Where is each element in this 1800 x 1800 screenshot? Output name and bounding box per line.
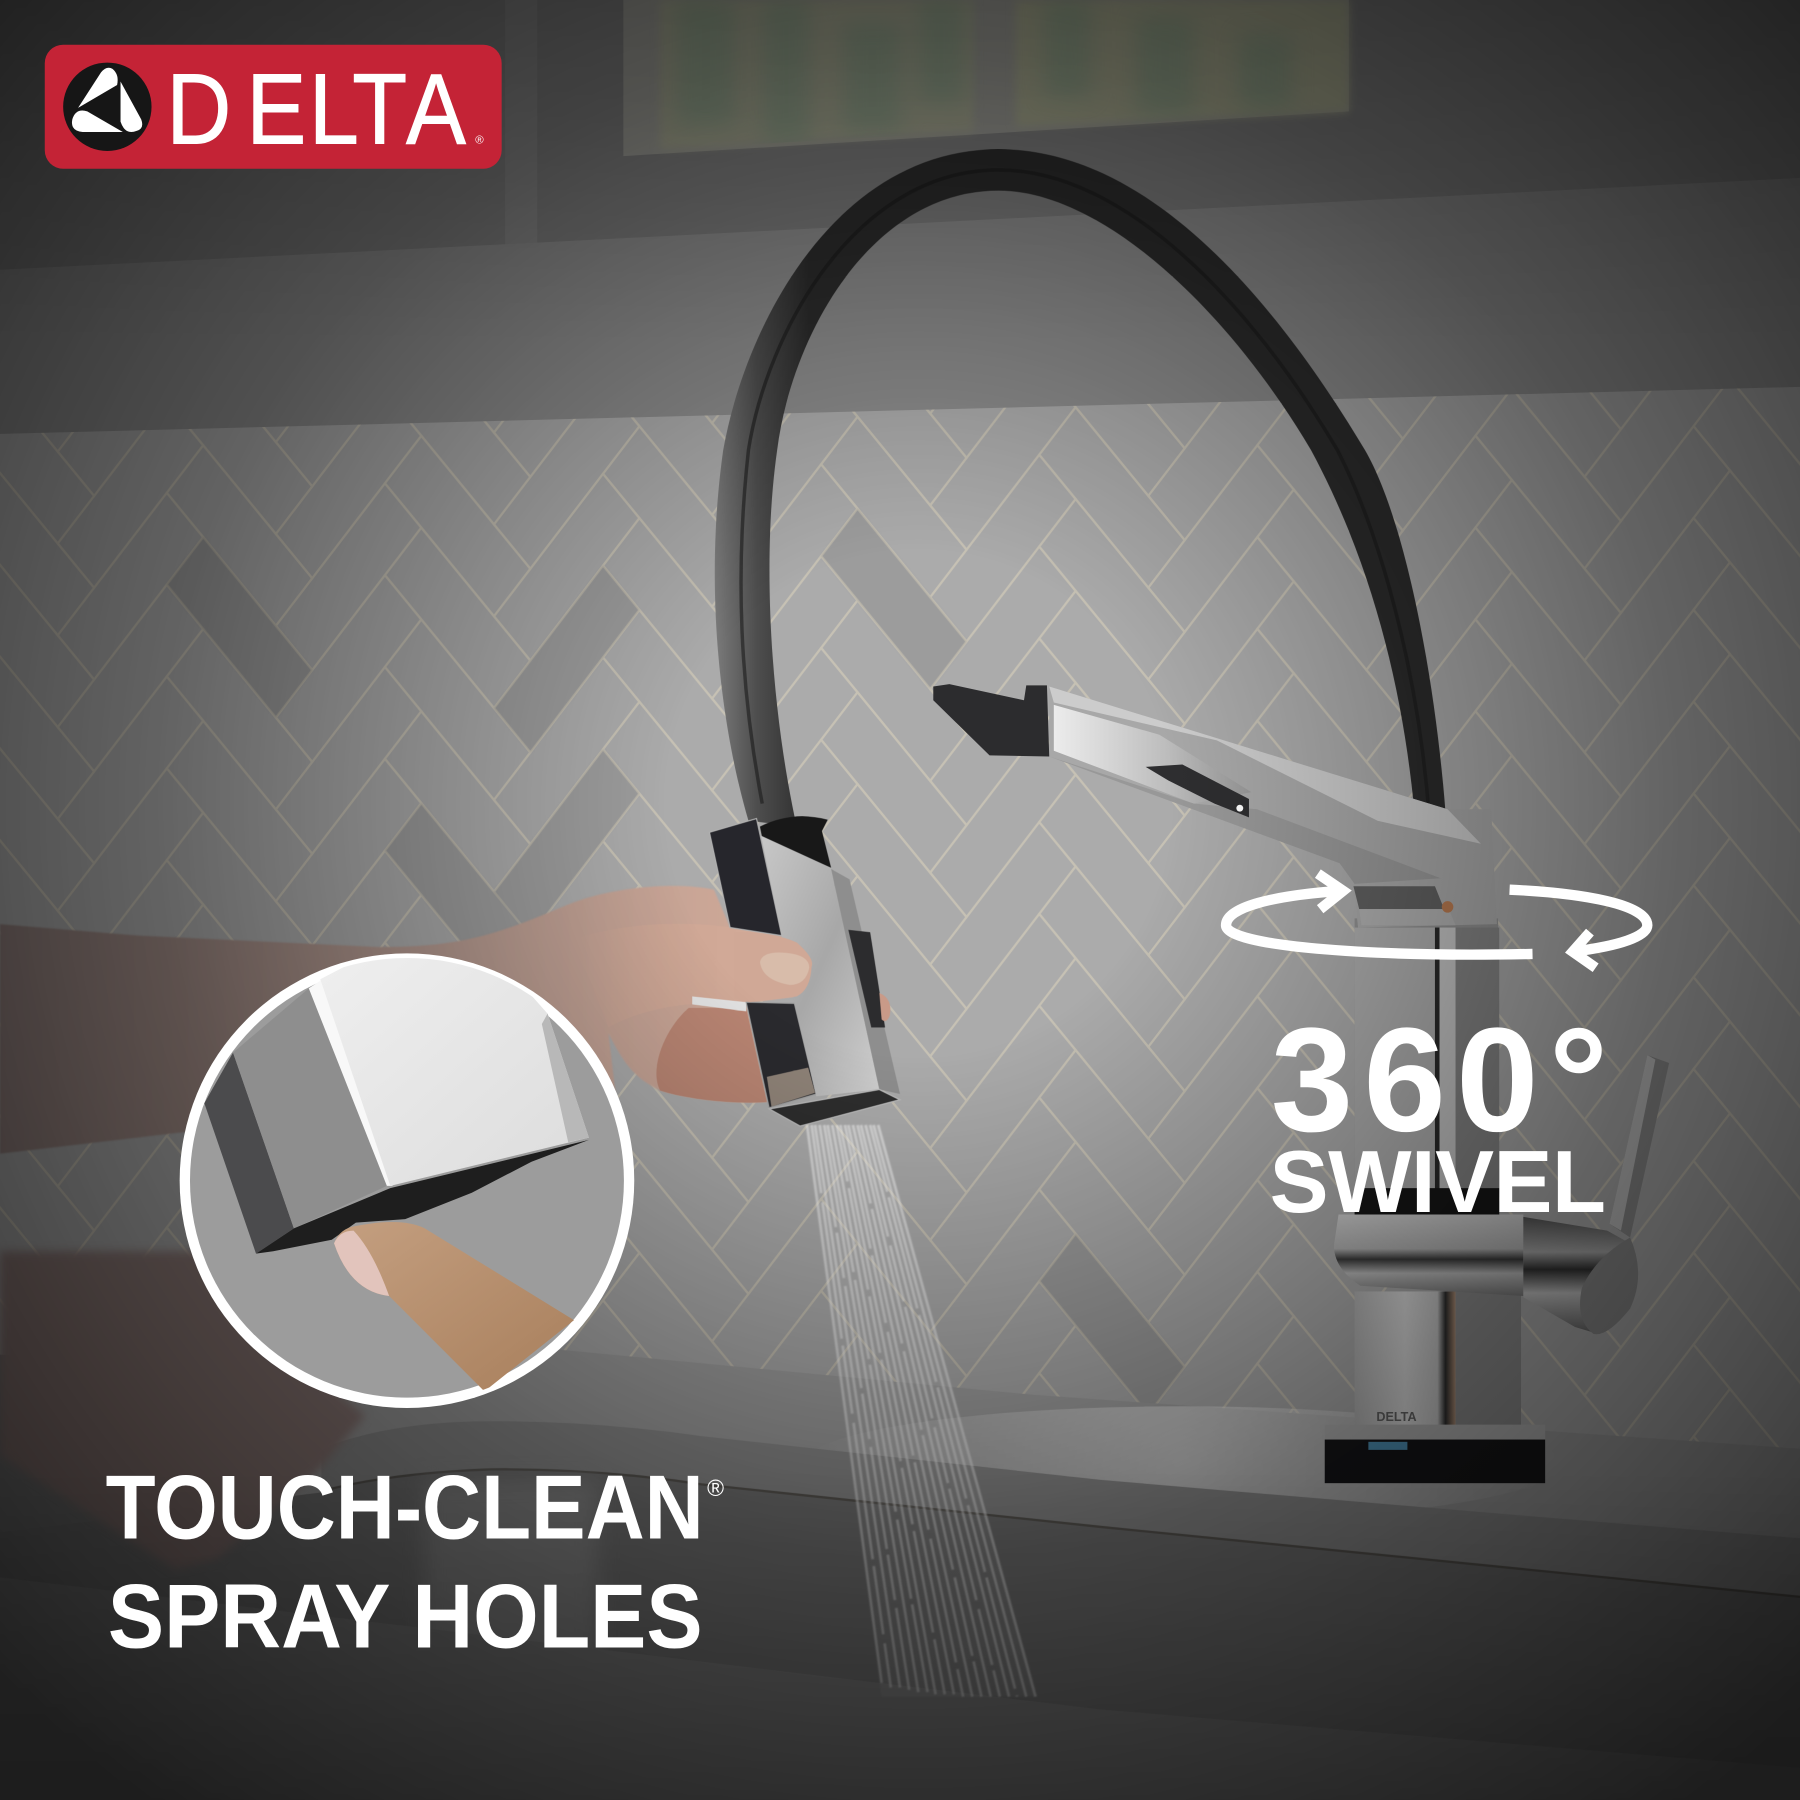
near counter ledge [0, 1577, 1800, 1800]
spout lower edge [1049, 757, 1441, 884]
gap between fingers [692, 996, 746, 1011]
handle lever [1609, 1055, 1669, 1238]
handle cap [1580, 1238, 1638, 1334]
swivel spout [933, 684, 1497, 928]
inset disc [180, 953, 634, 1408]
window sill band [0, 178, 1800, 434]
sprayer button [848, 930, 885, 1027]
sprayer chrome front [761, 836, 879, 1096]
herringbone tile backsplash [0, 387, 1800, 1464]
palm shadow [656, 1008, 767, 1103]
counter glow near faucet base [804, 1406, 1561, 1521]
inset circle: touch-clean close up [180, 947, 634, 1408]
sprayer lower left face [746, 1002, 816, 1108]
black base plate [1325, 1425, 1545, 1483]
sink basin [0, 1470, 1800, 1768]
lower hand [0, 1251, 365, 1569]
reflection on lower face [767, 1068, 815, 1107]
faucet column [1355, 918, 1499, 1194]
spray head underside [256, 1140, 589, 1254]
stainless sink rim [321, 1470, 1800, 1598]
thumb over sprayer [735, 932, 812, 1002]
heading: spray holes: SPRAY HOLES [108, 1566, 703, 1667]
spout upper face [1049, 686, 1481, 844]
basin reflection [425, 1481, 597, 1676]
handle connector [1523, 1217, 1636, 1334]
spray face [769, 1089, 900, 1126]
logo registered mark: ® [475, 134, 484, 146]
black reflection band [1355, 1188, 1499, 1216]
window frame posts [505, 0, 537, 245]
upper wall above the window sill [0, 0, 1800, 270]
swivel arrows [1226, 874, 1647, 968]
spout black tip [933, 684, 1049, 757]
light front face [320, 947, 589, 1186]
logo emblem [63, 63, 152, 151]
sprayer collar [760, 816, 831, 868]
horizontal body [1334, 1215, 1523, 1296]
window [623, 0, 1349, 156]
thumb nail detail [760, 952, 809, 985]
counter top [287, 1349, 1800, 1607]
dark side face [204, 1053, 294, 1254]
pull-down sprayer [709, 816, 900, 1126]
sprayer left black face [709, 818, 782, 936]
bright edge strip [309, 979, 393, 1186]
base block [1355, 1291, 1521, 1429]
heading: swivel: SWIVEL [1270, 1132, 1606, 1231]
faucet body [1325, 918, 1669, 1483]
hose groove [741, 170, 1428, 804]
upper arm and hand holding sprayer [0, 886, 812, 1154]
heading: touch-clean: TOUCH-CLEAN [106, 1457, 704, 1558]
counter front edge [321, 1421, 1800, 1598]
fingertip [334, 1222, 574, 1391]
faucet hose arc [715, 149, 1445, 827]
fingernail [334, 1231, 389, 1296]
water spray [807, 1125, 1038, 1697]
spout neck reflection [1353, 886, 1444, 909]
logo: Delta badge [45, 45, 502, 169]
fingertip behind sprayer [879, 993, 890, 1021]
thumb [574, 924, 812, 1027]
mid grey face [233, 988, 387, 1228]
spout sparkle [1236, 805, 1243, 812]
engraved brand: DELTA [1376, 1410, 1417, 1424]
foliage seen through the window [683, 8, 1284, 138]
spout bright facet [1054, 705, 1251, 804]
logo wordmark: DELTA [166, 54, 467, 166]
arm and hands behind the inset [0, 886, 812, 1569]
registered mark: ® [707, 1475, 724, 1501]
sprayer side [831, 869, 900, 1094]
orange reflection [1442, 901, 1453, 913]
marble veined tiles [167, 494, 1185, 1457]
spout dark sensor reflection [1146, 765, 1249, 817]
heading: 360 degrees: 360° [1271, 998, 1618, 1163]
